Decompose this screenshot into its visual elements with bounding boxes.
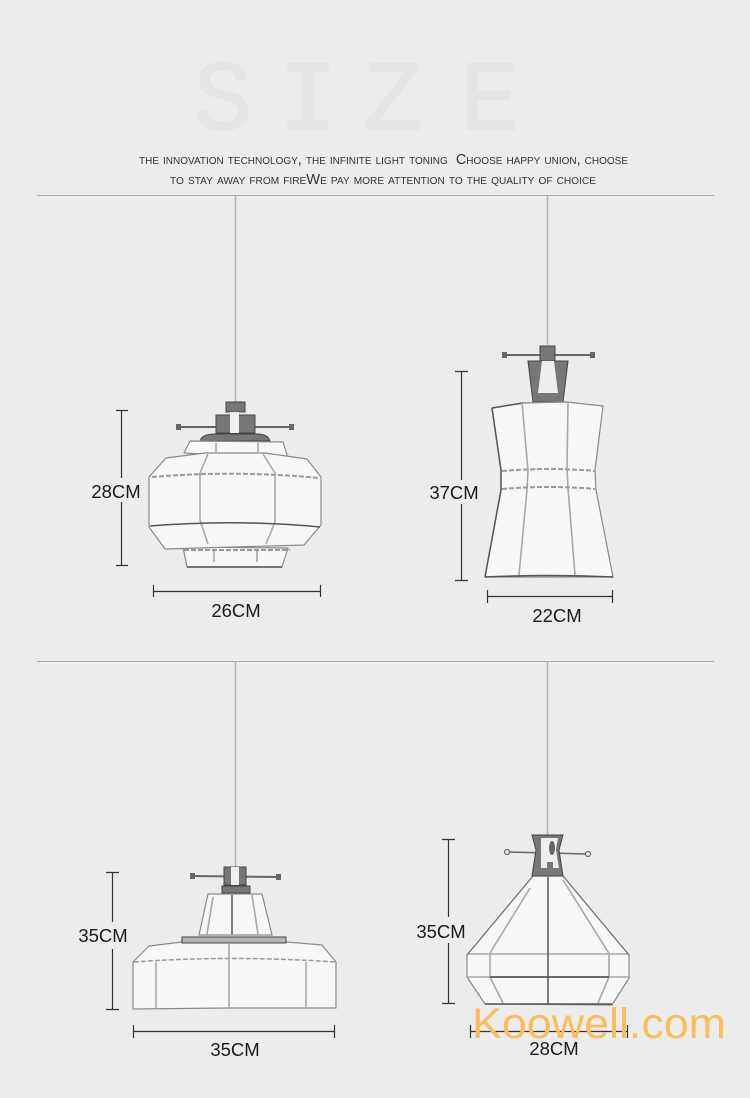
lamp 1 width dimension: 26CM — [211, 600, 261, 621]
subtitle text block: to stay away from fireWe pay more attention to the quality of choice — [170, 172, 596, 188]
lamp 3: wide drum pendant — [133, 661, 336, 1009]
lamp 1 height dimension: 28CM — [91, 481, 141, 502]
lamp 2 height dimension: 37CM — [429, 482, 479, 503]
title: SIZE: I — [278, 47, 338, 159]
title: SIZE — [193, 47, 520, 159]
lamp 4 height dimension — [416, 840, 466, 1004]
lamp 3 width dimension — [134, 1025, 334, 1060]
watermark: Koowell.com: Koowell.com — [472, 1000, 726, 1048]
lamp 4 width dimension — [470, 1025, 628, 1059]
title: SIZE: E — [460, 47, 520, 159]
lamp 2 height dimension — [429, 372, 479, 580]
subtitle text block — [139, 152, 628, 188]
lamp 1 height dimension — [91, 410, 141, 566]
lamp 4 width dimension: 28CM — [529, 1038, 579, 1059]
lamp 3 width dimension: 35CM — [210, 1039, 260, 1060]
lamp 3 height dimension — [78, 872, 128, 1010]
lamp 1: round lantern pendant — [149, 195, 321, 567]
lamp 2 width dimension — [488, 590, 612, 626]
subtitle text block: the innovation technology, the infinite light toning Choose happy union, choose — [139, 152, 628, 168]
title: SIZE: S — [193, 47, 253, 159]
title: SIZE: Z — [363, 47, 423, 159]
lamp 3 height dimension: 35CM — [78, 925, 128, 946]
lamp 4 height dimension: 35CM — [416, 921, 466, 942]
lamp 2: waisted pendant — [485, 195, 613, 577]
lamp 1 width dimension — [154, 585, 320, 621]
lamp 4: diamond pendant — [467, 661, 629, 1005]
lamp 2 width dimension: 22CM — [532, 605, 582, 626]
